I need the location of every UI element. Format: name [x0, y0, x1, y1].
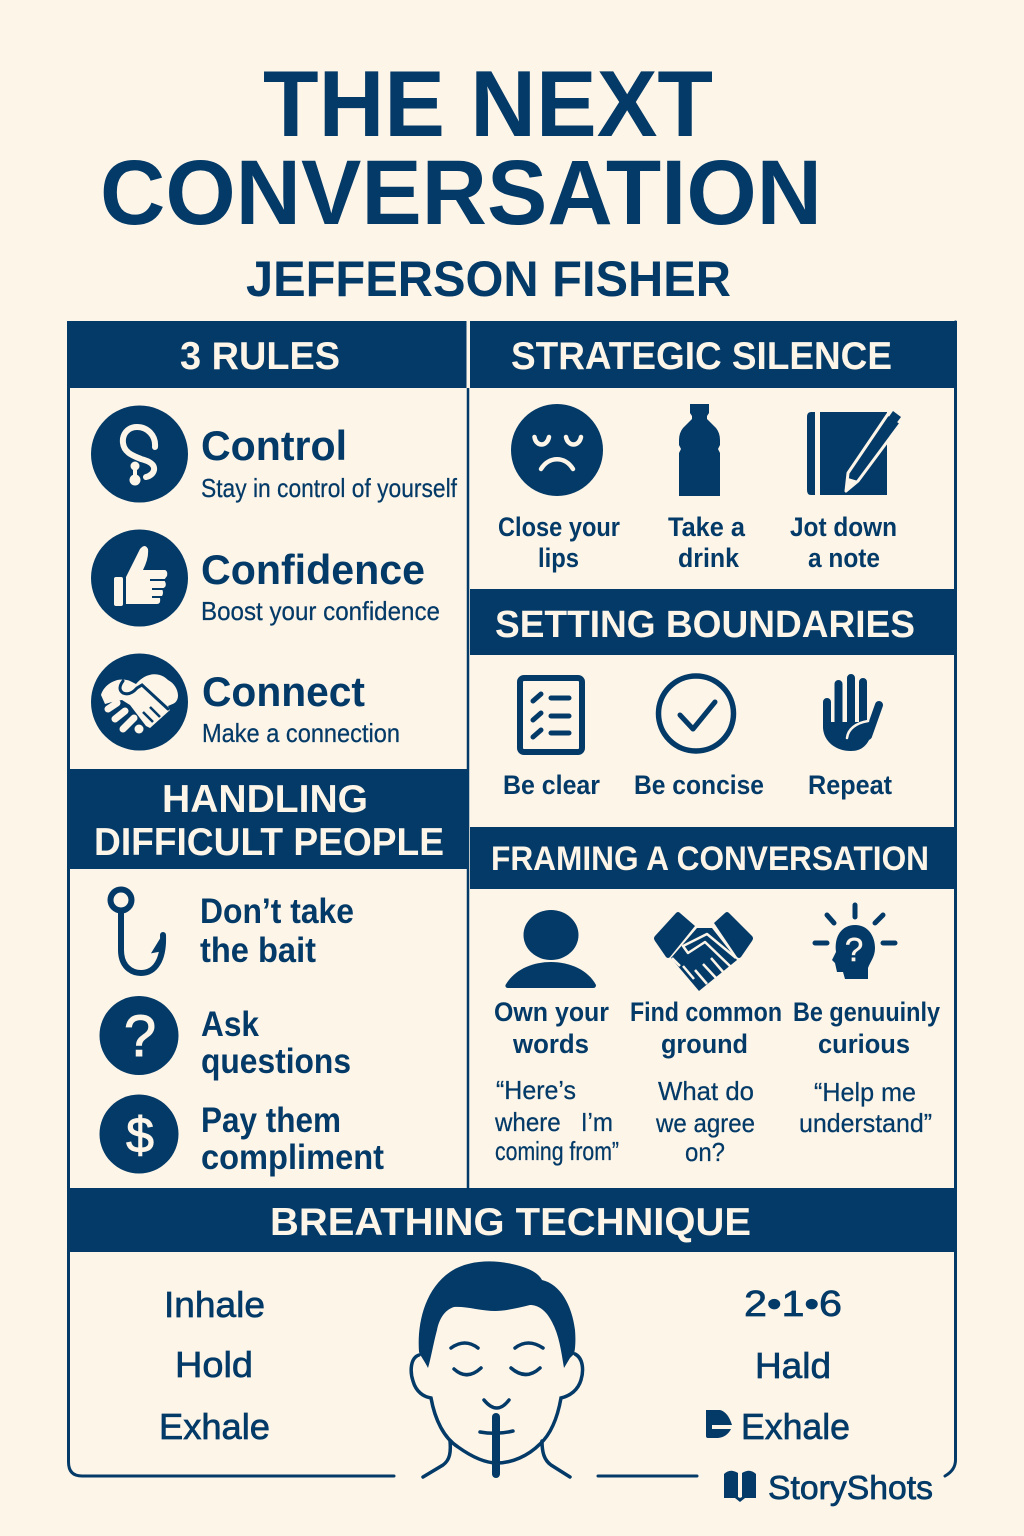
heading: setting boundaries: [470, 589, 956, 655]
title: [100, 51, 822, 244]
icon: face breathing: [411, 1261, 583, 1477]
panel frame: [68, 322, 956, 1476]
label: close your lips: lips: [538, 543, 579, 573]
icon: question: ?: [124, 1004, 156, 1069]
panel: breathing technique: [67, 1188, 956, 1477]
icon: exhale mark: [706, 1410, 732, 1438]
item: connect: [202, 668, 400, 748]
item: ask questions: Ask: [201, 1005, 259, 1044]
icon: person: [505, 910, 596, 988]
item: own your words: Own your: [494, 997, 609, 1027]
item: own your words: coming from”: [495, 1136, 619, 1166]
item: don't take the bait: [200, 892, 354, 970]
item: be genuinely curious: curious: [818, 1029, 910, 1059]
heading: handling difficult people: [67, 769, 468, 869]
heading: setting boundaries: SETTING BOUNDARIES: [495, 604, 915, 646]
heading: breathing technique: BREATHING TECHNIQUE: [270, 1201, 751, 1244]
icon: control: [91, 406, 188, 502]
heading: framing a conversation: [470, 827, 956, 889]
label: take a drink: drink: [678, 543, 740, 573]
item: pay them compliment: compliment: [201, 1138, 384, 1177]
icon: notebook and pencil: [807, 411, 901, 495]
label: jot down a note: a note: [808, 543, 880, 573]
label: jot down a note: Jot down: [790, 512, 897, 542]
steps: left column: Inhale: [164, 1284, 265, 1325]
item: confidence: Boost your confidence: [201, 596, 440, 626]
icon: dollar: [100, 1094, 178, 1174]
label: jot down a note: [790, 512, 897, 573]
heading: 3 rules: 3 RULES: [180, 335, 340, 378]
steps: right column: 2•1•6: [744, 1283, 842, 1324]
item: ask questions: [201, 1005, 351, 1081]
icon: sad face: [511, 404, 603, 496]
icon: raised hand: [823, 678, 879, 751]
steps: right column: Exhale: [741, 1406, 850, 1447]
steps: right column: [741, 1283, 850, 1447]
item: find common ground: we agree: [655, 1108, 755, 1138]
item: find common ground: on?: [685, 1137, 725, 1167]
icon: check circle: [658, 676, 734, 751]
panel: strategic silence: [470, 321, 957, 573]
item: find common ground: Find common: [630, 997, 782, 1027]
item: own your words: words: [512, 1029, 589, 1059]
steps: left column: [159, 1284, 270, 1447]
heading: handling difficult people: DIFFICULT PEOPLE: [94, 821, 444, 864]
item: pay them compliment: Pay them: [201, 1101, 341, 1140]
item: own your words: where I’m: [494, 1107, 613, 1137]
item: confidence: [201, 546, 440, 626]
item: be genuinely curious: Be genuuinly: [793, 997, 940, 1027]
heading: strategic silence: [470, 321, 957, 388]
label: close your lips: Close your: [498, 512, 620, 542]
item: find common ground: ground: [661, 1029, 748, 1059]
icon: handshake: [91, 654, 188, 750]
item: don't take the bait: the bait: [200, 931, 316, 970]
panel: 3 rules: [67, 321, 466, 750]
icon: curious head: [815, 905, 895, 979]
item: control: Control: [201, 422, 347, 469]
item: find common ground: [630, 997, 782, 1167]
item: control: Stay in control of yourself: [201, 473, 458, 503]
item: own your words: “Here’s: [496, 1075, 576, 1105]
steps: right column: Hald: [755, 1345, 831, 1386]
item: be genuinely curious: “Help me: [814, 1077, 916, 1107]
logo: storyshots: StoryShots: [768, 1469, 933, 1506]
icon: book: [724, 1471, 756, 1502]
author: JEFFERSON FISHER: [246, 251, 731, 307]
item: be genuinely curious: [793, 997, 940, 1138]
steps: left column: Exhale: [159, 1406, 270, 1447]
item: don't take the bait: Don’t take: [200, 892, 354, 931]
item: control: [201, 422, 458, 503]
item: ask questions: questions: [201, 1042, 351, 1081]
icon: fish hook: [110, 890, 164, 973]
icon: checklist: [520, 678, 582, 752]
item: own your words: [494, 997, 619, 1166]
item: pay them compliment: [201, 1101, 384, 1177]
icon: curious head: ?: [845, 931, 863, 968]
icon: question: [100, 996, 178, 1075]
item: connect: Connect: [202, 668, 365, 715]
title: THE NEXT: [263, 51, 713, 156]
label: take a drink: [668, 512, 746, 573]
label: be clear: Be clear: [503, 770, 600, 800]
panel: setting boundaries: [470, 589, 956, 800]
icon: handshake diamonds: [654, 912, 753, 991]
heading: framing a conversation: FRAMING A CONVERSATION: [491, 840, 929, 878]
label: take a drink: Take a: [668, 512, 746, 542]
steps: left column: Hold: [175, 1344, 253, 1385]
panel: handling difficult people: [67, 769, 468, 1177]
icon: thumbs up: [91, 530, 188, 626]
icon: dollar: $: [126, 1107, 154, 1163]
heading: strategic silence: STRATEGIC SILENCE: [511, 335, 892, 378]
item: be genuinely curious: understand”: [799, 1108, 932, 1138]
heading: breathing technique: [67, 1188, 956, 1252]
label: repeat: Repeat: [808, 770, 892, 800]
heading: handling difficult people: HANDLING: [162, 778, 368, 821]
label: close your lips: [498, 512, 620, 573]
item: confidence: Confidence: [201, 546, 425, 593]
icon: bottle: [679, 404, 720, 496]
heading: 3 rules: [67, 321, 466, 388]
item: connect: Make a connection: [202, 718, 400, 748]
title: CONVERSATION: [100, 142, 822, 244]
panel: framing a conversation: [470, 827, 956, 1167]
label: be concise: Be concise: [634, 770, 764, 800]
item: find common ground: What do: [658, 1076, 754, 1106]
